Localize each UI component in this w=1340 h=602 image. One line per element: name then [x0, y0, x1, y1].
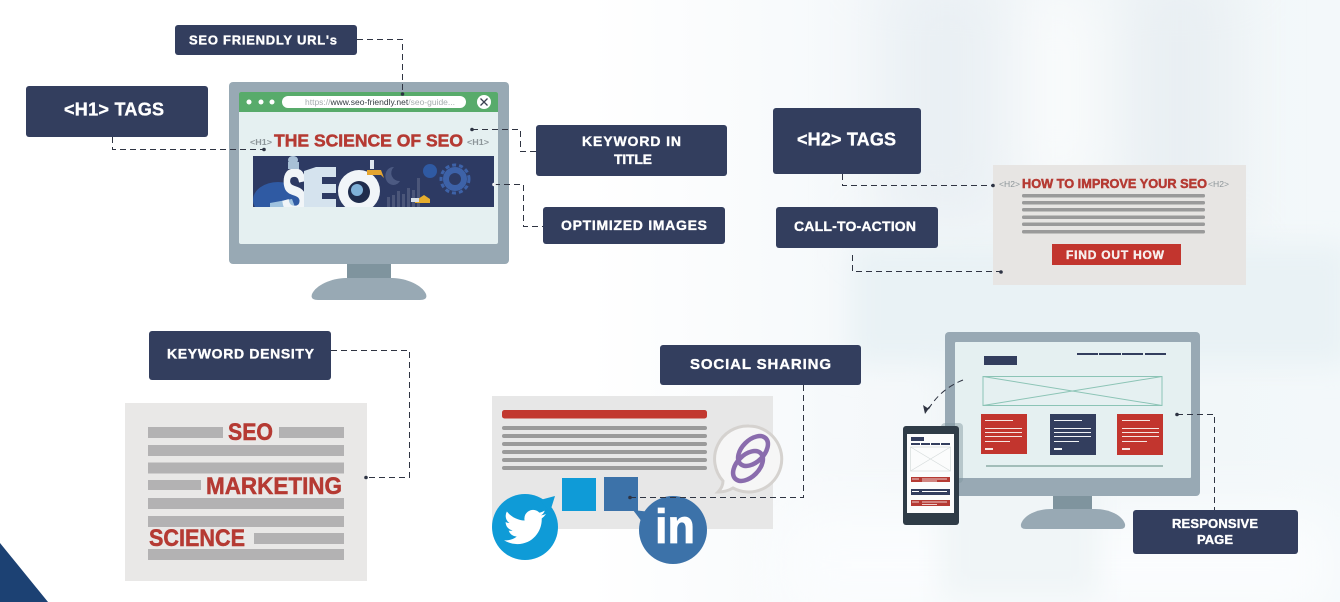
gray lines — [502, 426, 707, 470]
window dots — [246, 100, 274, 104]
keyword SEO: SEO — [228, 419, 273, 446]
close button — [477, 95, 491, 109]
label: keyword in title: KEYWORD IN — [582, 133, 681, 149]
url text: https://www.seo-friendly.net/seo-guide... — [305, 97, 455, 107]
address pill — [282, 96, 466, 108]
label: keyword density: KEYWORD DENSITY — [167, 346, 315, 362]
label: H2 tags — [773, 108, 921, 174]
share square — [562, 478, 596, 511]
heading text: HOW TO IMPROVE YOUR SEO — [1022, 176, 1207, 191]
page title: THE SCIENCE OF SEO — [274, 130, 463, 150]
keyword MARKETING: MARKETING — [206, 473, 342, 500]
connector dots — [262, 92, 1179, 499]
label: H1 tags: <H1> TAGS — [64, 100, 164, 120]
hero placeholder — [983, 376, 1162, 406]
label: social sharing: SOCIAL SHARING — [690, 356, 831, 373]
footer line — [986, 465, 1163, 467]
h1 tag left: <H1> — [250, 138, 272, 147]
label: responsive page: RESPONSIVE — [1172, 516, 1258, 531]
card navy middle — [1050, 414, 1096, 455]
label: keyword density — [149, 331, 331, 380]
keyword SCIENCE: SCIENCE — [149, 525, 245, 552]
h1 tag right: <H1> — [467, 138, 489, 147]
card red left — [981, 414, 1027, 454]
hero image: S — [282, 157, 307, 226]
CTA button — [1052, 244, 1181, 265]
screen — [955, 342, 1191, 478]
browser bar — [239, 92, 498, 112]
frame — [945, 332, 1200, 496]
monitor base — [312, 278, 426, 300]
monitor screen — [239, 92, 498, 244]
icon: linkedin — [633, 496, 707, 564]
label: SEO friendly URLs — [175, 25, 357, 55]
h2 tag right: <H2> — [1208, 180, 1229, 189]
label: keyword in title: TITLE — [614, 151, 652, 167]
panel: browser monitor — [229, 82, 509, 300]
panel: responsive desktop monitor — [903, 332, 1200, 529]
h2 tag left: <H2> — [999, 180, 1020, 189]
panel: H2 page — [993, 165, 1246, 285]
corner triangle — [0, 543, 48, 602]
hero image — [253, 156, 494, 207]
card red right — [1117, 414, 1163, 455]
label: call to action — [776, 207, 938, 248]
icon: linkedin: in — [655, 501, 695, 554]
label: responsive page: PAGE — [1197, 532, 1233, 547]
connector lines — [112, 40, 1214, 510]
linked square — [604, 477, 638, 511]
nav lines — [1077, 353, 1166, 355]
monitor frame — [229, 82, 509, 264]
label: keyword in title — [536, 125, 727, 176]
label: H2 tags: <H2> TAGS — [797, 130, 896, 150]
icon: link bubble — [715, 426, 782, 492]
base — [1021, 509, 1125, 529]
label: social sharing — [660, 345, 861, 385]
panel: social sharing page — [492, 396, 782, 564]
stand — [1053, 496, 1092, 510]
label: call to action: CALL-TO-ACTION — [794, 218, 916, 234]
icon: twitter — [492, 494, 558, 560]
phone shadow — [941, 423, 963, 483]
arrow head — [923, 404, 932, 414]
panel: keyword density page — [125, 403, 367, 581]
CTA button: FIND OUT HOW — [1066, 248, 1165, 262]
phone — [903, 426, 959, 525]
logo block — [984, 356, 1017, 365]
monitor stand — [347, 264, 391, 279]
label: responsive page — [1133, 510, 1298, 554]
body lines — [1022, 194, 1205, 234]
label: H1 tags — [26, 86, 208, 137]
label: SEO friendly URLs: SEO FRIENDLY URL's — [189, 32, 337, 48]
label: optimized images: OPTIMIZED IMAGES — [561, 217, 707, 233]
red headline bar — [502, 410, 707, 418]
text bars — [148, 427, 344, 560]
label: optimized images — [543, 207, 725, 244]
